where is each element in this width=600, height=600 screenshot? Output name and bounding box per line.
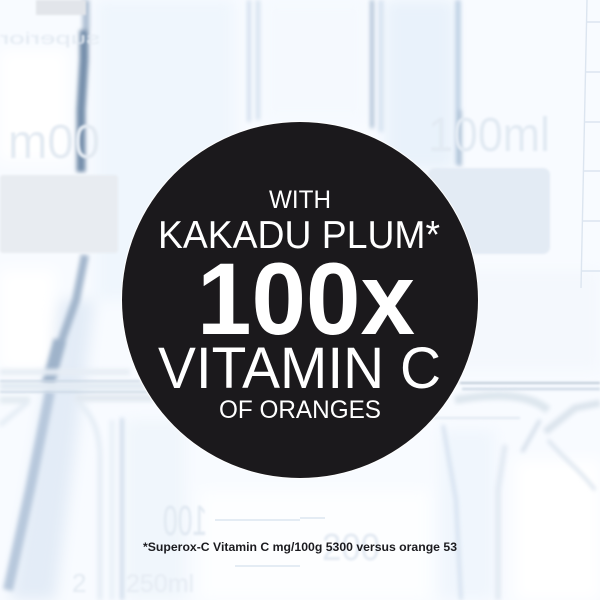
faint print on the glassware: 200	[322, 527, 380, 569]
footnote: *Superox-C Vitamin C mg/100g 5300 versus orange 53	[143, 542, 457, 554]
label patches	[36, 0, 86, 15]
black circle badge	[121, 121, 479, 479]
text: 100x: 100x	[197, 242, 415, 356]
text: OF ORANGES: OF ORANGES	[219, 396, 381, 424]
beaker rims	[0, 372, 600, 600]
glass tube edges	[8, 0, 460, 590]
text: VITAMIN C: VITAMIN C	[158, 336, 441, 401]
faint print on the glassware: 100	[163, 497, 207, 545]
faint print on the glassware: superior	[0, 29, 100, 48]
faint print on the glassware: 2	[72, 568, 86, 598]
faint print on the glassware: 100ml	[428, 109, 550, 162]
faint print on the glassware: 250ml	[126, 570, 194, 598]
text: WITH: WITH	[269, 186, 331, 214]
faint print on the glassware: m00	[8, 116, 100, 169]
graduation scale right	[215, 0, 600, 566]
text: KAKADU PLUM*: KAKADU PLUM*	[158, 214, 440, 257]
